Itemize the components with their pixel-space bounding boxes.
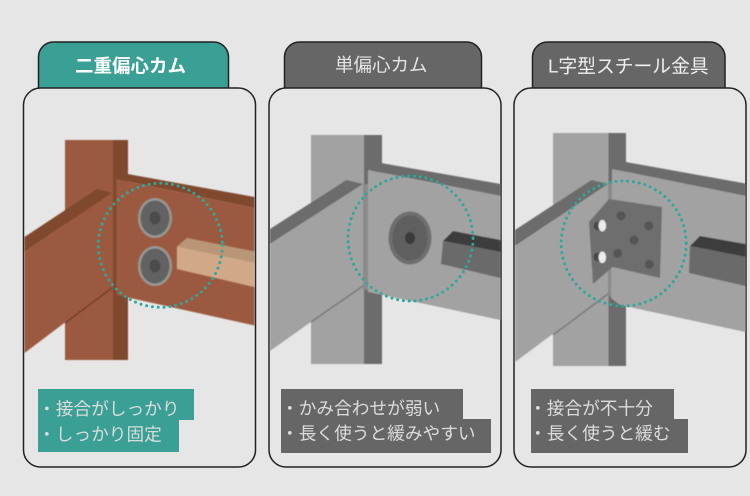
- text block: benefits: ・接合がしっかり: [38, 399, 180, 419]
- text block: benefits: ・しっかり固定: [38, 424, 162, 444]
- tab: L字型スチール金具: L字型スチール金具: [548, 55, 709, 76]
- text block: drawbacks: [529, 389, 688, 453]
- tab: 二重偏心カム: 二重偏心カム: [75, 55, 186, 76]
- text block: drawbacks: ・長く使うと緩む: [529, 424, 671, 444]
- icon: single cam: [388, 212, 432, 264]
- tab: L字型スチール金具: [532, 42, 725, 89]
- panel: L字型スチール金具: [514, 88, 746, 467]
- icon: upper cam: [138, 198, 172, 238]
- tab: 単偏心カム: 単偏心カム: [335, 54, 428, 75]
- text block: drawbacks: ・接合が不十分: [529, 398, 653, 418]
- text block: drawbacks: ・長く使うと緩みやすい: [281, 424, 476, 444]
- panel: 二重偏心カム: [24, 88, 256, 467]
- panel: 単偏心カム: [269, 88, 501, 467]
- callout: dotted focus circle: [348, 176, 473, 301]
- illustration: wood joint with two cams: [24, 140, 254, 360]
- illustration: grey joint with L bracket: [515, 133, 746, 366]
- callout: dotted focus circle: [561, 181, 686, 306]
- tab: 二重偏心カム: [38, 42, 228, 89]
- tab: 単偏心カム: [284, 42, 482, 89]
- callout: dotted focus circle: [98, 183, 222, 307]
- text block: drawbacks: ・かみ合わせが弱い: [281, 398, 440, 418]
- text block: benefits: [38, 389, 194, 452]
- icon: lower cam: [138, 246, 172, 286]
- text block: drawbacks: [281, 389, 491, 453]
- icon: L bracket: [589, 199, 662, 284]
- illustration: grey joint with single cam: [270, 135, 500, 364]
